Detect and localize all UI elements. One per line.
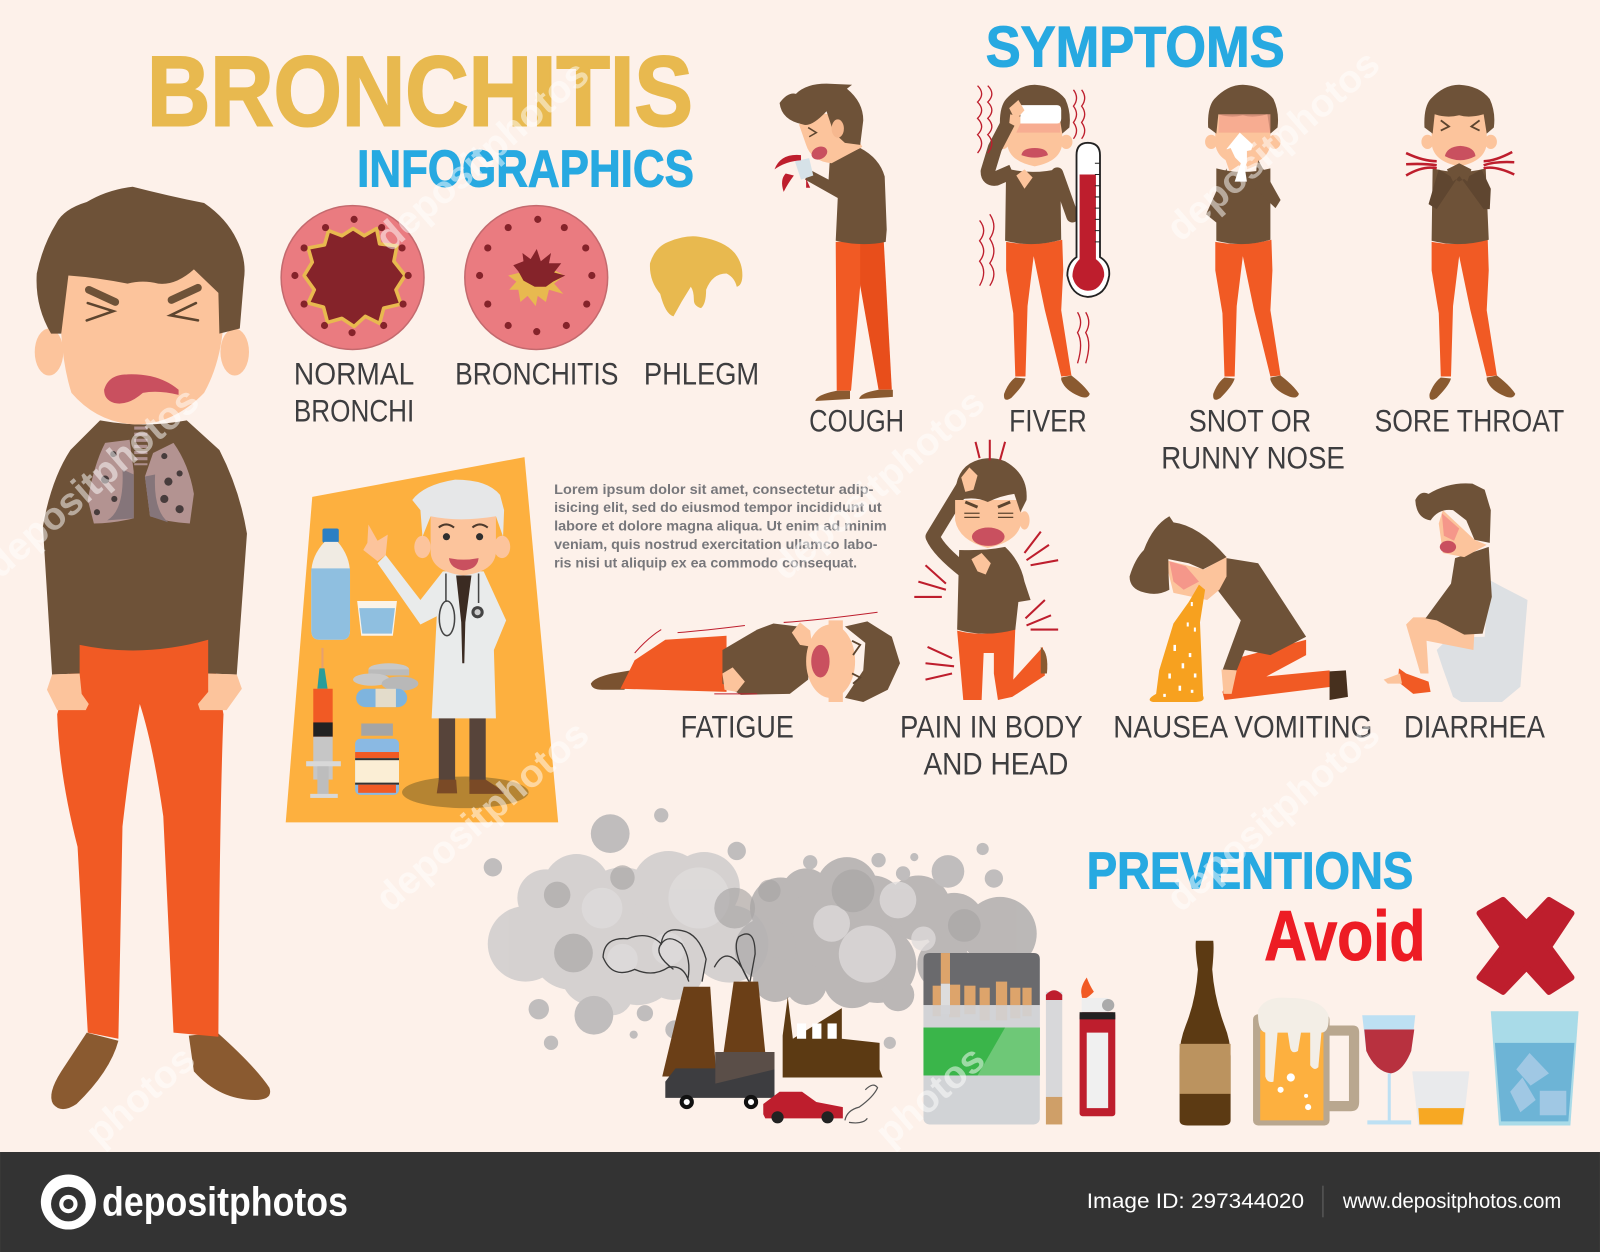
heading: preventions: PREVENTIONS	[1087, 843, 1413, 901]
label: sore throat: SORE THROAT	[1374, 403, 1564, 439]
text block: lorem ipsum	[554, 482, 887, 571]
text block: lorem ipsum: isicing elit, sed do eiusmod tempor incididunt ut	[554, 500, 882, 516]
label: pain in body and head: PAIN IN BODY	[900, 709, 1083, 745]
label: normal bronchi: BRONCHI	[294, 392, 414, 428]
text block: lorem ipsum: labore et dolore magna aliqua. Ut enim ad minim	[554, 519, 887, 535]
watermarks: depositphotos	[1158, 712, 1388, 920]
label: bronchitis: BRONCHITIS	[455, 356, 618, 392]
watermarks: photos	[78, 1038, 203, 1155]
icon: pills	[353, 663, 418, 707]
symptom: cough	[774, 84, 904, 439]
symptom: diarrhea	[1384, 483, 1546, 745]
label: snot or runny nose	[1161, 403, 1345, 475]
icon: glass of water	[357, 601, 397, 636]
website: www.depositphotos.com	[1342, 1189, 1561, 1213]
label: normal bronchi: NORMAL	[294, 356, 414, 392]
label: fever: FIVER	[1009, 403, 1087, 439]
main figure: sick man	[35, 187, 270, 1109]
watermarks: photos	[867, 1038, 993, 1155]
watermarks: depositphotos	[763, 381, 993, 588]
car exhaust	[845, 1085, 878, 1123]
panel: bronchi comparison	[281, 206, 759, 428]
truck	[665, 1052, 774, 1109]
shirt	[43, 420, 247, 674]
heading: symptoms: SYMPTOMS	[986, 15, 1285, 79]
symptom: sore throat	[1374, 85, 1564, 439]
icon: wine glass	[1362, 1015, 1415, 1124]
symptom: nausea vomiting	[1113, 516, 1372, 745]
watermarks: depositphotos	[1158, 42, 1388, 250]
label: nausea vomiting: NAUSEA VOMITING	[1113, 709, 1372, 745]
heading: avoid: Avoid	[1264, 896, 1425, 975]
footer bar	[0, 1152, 1600, 1252]
icon: cigarette	[1046, 990, 1062, 1124]
watermarks	[0, 42, 1388, 1155]
label: snot or runny nose: RUNNY NOSE	[1161, 439, 1345, 475]
icon: beer mug	[1253, 998, 1359, 1125]
lungs	[88, 427, 194, 523]
cooling towers	[662, 987, 716, 1076]
mouth	[104, 374, 179, 404]
label: pain in body and head	[900, 709, 1083, 781]
label: fatigue: FATIGUE	[681, 709, 794, 745]
icon: cigarette pack	[923, 953, 1040, 1124]
icon: inflamed bronchi	[465, 206, 608, 349]
text block: lorem ipsum: Lorem ipsum dolor sit amet, consectetur adip-	[554, 482, 874, 498]
symptom: fatigue	[591, 612, 900, 745]
logo text: depositphotos	[102, 1178, 348, 1224]
water fill	[359, 608, 395, 634]
logo icon	[41, 1174, 96, 1230]
icon: whisky glass	[1412, 1071, 1469, 1125]
car	[763, 1092, 843, 1123]
symptom: snot or runny nose	[1161, 85, 1345, 475]
label: pain in body and head: AND HEAD	[923, 745, 1068, 781]
text block: lorem ipsum: veniam, quis nostrud exercitation ullamco labo-	[554, 537, 878, 553]
text block: lorem ipsum: ris nisi ut aliquip ex ea commodo consequat.	[554, 555, 857, 571]
label: diarrhea: DIARRHEA	[1404, 709, 1546, 745]
icon: lighter	[1080, 978, 1115, 1116]
label: normal bronchi	[294, 356, 414, 428]
icon: red cross	[1480, 900, 1571, 992]
subtitle: INFOGRAPHICS	[357, 141, 694, 199]
trousers	[57, 638, 223, 1039]
panel: doctor advice	[286, 457, 558, 822]
face	[61, 265, 222, 424]
symptom: fever	[978, 85, 1109, 439]
icon: syringe	[306, 648, 341, 798]
shoes	[51, 1033, 270, 1109]
label: cough: COUGH	[809, 403, 904, 439]
panel background	[286, 457, 558, 822]
icon: medicine vial	[355, 723, 399, 795]
divider	[1322, 1186, 1323, 1217]
doctor figure	[363, 480, 529, 808]
icon: beer bottle	[1180, 941, 1231, 1125]
icon: water bottle	[311, 529, 350, 640]
eyes and brows	[89, 288, 198, 302]
factory building	[783, 997, 883, 1078]
hands	[47, 673, 242, 710]
icon: normal bronchi	[281, 206, 424, 349]
title: BRONCHITIS	[147, 36, 693, 147]
symptom: pain in body and head	[900, 440, 1083, 781]
ears	[35, 329, 249, 375]
watermarks: depositphotos	[368, 52, 597, 260]
smoke cloud	[484, 808, 1037, 1050]
label: phlegm: PHLEGM	[644, 356, 759, 392]
icon: phlegm	[650, 236, 742, 316]
image id: Image ID: 297344020	[1087, 1189, 1304, 1213]
hair	[37, 187, 245, 334]
smoke outline	[603, 930, 755, 982]
icon: thermometer	[1067, 143, 1109, 297]
watermarks: depositphotos	[368, 712, 597, 920]
icon: water glass with ice	[1491, 1011, 1579, 1125]
label: snot or runny nose: SNOT OR	[1189, 403, 1311, 439]
factory and traffic	[603, 930, 883, 1123]
